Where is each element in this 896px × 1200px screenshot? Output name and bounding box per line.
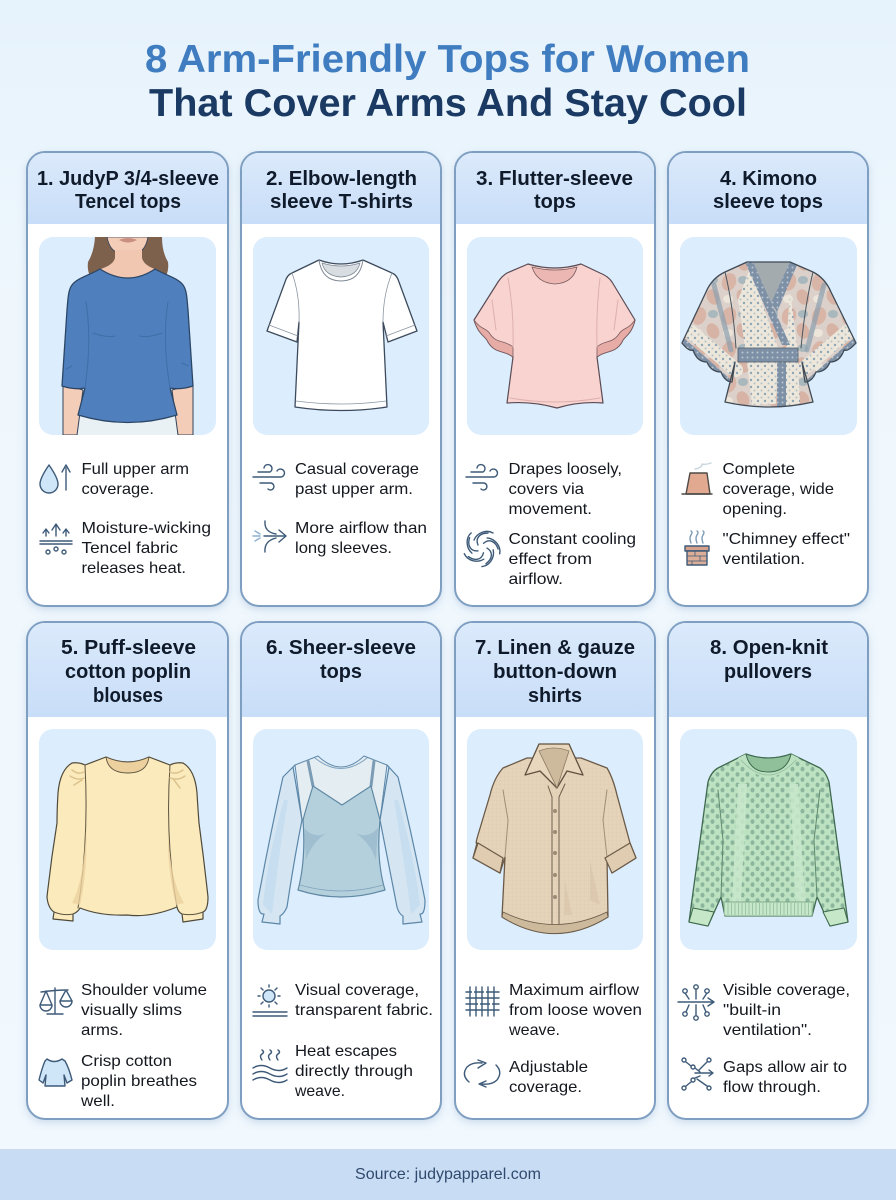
- card 8 header: [669, 623, 867, 717]
- icon: nodes with arrow: [678, 985, 714, 1020]
- text: adjustable coverage: [509, 1059, 588, 1096]
- text: visible coverage: ventilation".: [723, 1022, 812, 1039]
- text: casual coverage: Casual coverage: [295, 461, 419, 478]
- text: full upper arm coverage: Full upper arm: [82, 461, 189, 478]
- card 3 header: tops: [534, 191, 576, 213]
- text: visible coverage: Visible coverage,: [723, 982, 850, 999]
- card 1 header: 1. JudyP 3/4-sleeve: [37, 168, 219, 190]
- text: shoulder volume: Shoulder volume: [81, 982, 207, 999]
- panel: card 7 linen and gauze shirts: [455, 622, 655, 1119]
- text: heat escapes: Heat escapes: [295, 1043, 397, 1060]
- text: chimney effect: "Chimney effect": [722, 531, 850, 548]
- icon: woven lattice: [466, 987, 499, 1016]
- text: complete coverage: [722, 461, 834, 518]
- text: shoulder volume: visually slims: [81, 1002, 182, 1019]
- text: visual coverage: Visual coverage,: [295, 982, 419, 999]
- text: drapes loosely: covers via: [508, 481, 584, 498]
- text: crisp cotton: Crisp cotton: [81, 1053, 172, 1070]
- image panel: woman in blue top: [39, 237, 216, 435]
- card 6 header: tops: [320, 661, 362, 683]
- panel: card 4 kimono sleeve tops: [668, 152, 868, 606]
- card 6 header: 6. Sheer-sleeve: [266, 637, 416, 659]
- panel: card 6 sheer-sleeve tops: [241, 622, 441, 1119]
- text: constant cooling: Constant cooling: [508, 531, 636, 548]
- text: gaps allow air: flow through.: [723, 1079, 821, 1096]
- text: constant cooling: effect from: [508, 551, 592, 568]
- text: chimney effect: [722, 531, 850, 568]
- card 4 header: sleeve tops: [713, 191, 823, 213]
- text: crisp cotton: poplin breathes: [81, 1073, 197, 1090]
- card 7 header: shirts: [528, 685, 582, 707]
- text: constant cooling: [508, 531, 636, 588]
- card 4 header: [669, 153, 867, 224]
- card 8 header: 8. Open-knit: [710, 637, 828, 659]
- card 8 header: pullovers: [724, 661, 812, 683]
- card 2 header: [242, 153, 440, 224]
- text: drapes loosely: Drapes loosely,: [508, 461, 622, 478]
- text: more airflow: More airflow than: [295, 520, 427, 537]
- icon: brick chimney: [685, 531, 709, 565]
- text: full upper arm coverage: [82, 461, 189, 498]
- text: complete coverage: Complete: [722, 461, 795, 478]
- text: moisture-wicking tencel: [82, 520, 211, 577]
- image panel: pink flutter top: [467, 237, 643, 435]
- panel: card 5 puff-sleeve blouses: [27, 622, 228, 1119]
- card 3 header: 3. Flutter-sleeve: [476, 168, 633, 190]
- panel: card 8 open-knit pullovers: [668, 622, 868, 1119]
- image panel: green open-knit pullover: [680, 729, 857, 950]
- text: drapes loosely: movement.: [508, 501, 592, 518]
- icon: blouse: [39, 1059, 72, 1086]
- image panel: linen shirt: [467, 729, 643, 950]
- text: constant cooling: airflow.: [508, 571, 563, 588]
- text: casual coverage: [295, 461, 419, 498]
- card 3 header: [456, 153, 654, 224]
- footer source band: [0, 1149, 896, 1200]
- card 7 header: 7. Linen & gauze: [475, 637, 635, 659]
- text: maximum airflow: [508, 982, 642, 1039]
- text: adjustable coverage: coverage.: [509, 1079, 582, 1096]
- image panel: patterned kimono: [680, 237, 857, 435]
- panel: card 3 flutter-sleeve tops: [455, 152, 655, 606]
- card 7 header: [456, 623, 654, 717]
- text: gaps allow air: [723, 1059, 847, 1096]
- icon: swirling fan: [463, 531, 501, 568]
- text: casual coverage: past upper arm.: [295, 481, 413, 498]
- text: crisp cotton: well.: [80, 1093, 115, 1110]
- panel: card 2 elbow-length T-shirts: [241, 152, 441, 606]
- text: moisture-wicking tencel: Moisture-wicking: [82, 520, 211, 537]
- text: moisture-wicking tencel: Tencel fabric: [82, 540, 178, 557]
- card 4 header: 4. Kimono: [720, 168, 817, 190]
- card 7 header: button-down: [493, 661, 617, 683]
- image panel: white T-shirt: [253, 237, 429, 435]
- title: 8 Arm-Friendly Tops for Women: [145, 38, 750, 81]
- title: That Cover Arms And Stay Cool: [149, 82, 747, 125]
- text: more airflow: [295, 520, 427, 557]
- icon: wind: [253, 465, 284, 490]
- text: moisture-wicking tencel: releases heat.: [82, 560, 186, 577]
- text: complete coverage: coverage, wide: [722, 481, 834, 498]
- text: visible coverage: "built-in: [723, 1002, 781, 1019]
- text: shoulder volume: arms.: [81, 1022, 123, 1039]
- text: maximum airflow: from loose woven: [509, 1002, 642, 1019]
- card 5 header: blouses: [93, 685, 163, 707]
- text: maximum airflow: Maximum airflow: [509, 982, 639, 999]
- card 2 header: 2. Elbow-length: [266, 168, 417, 190]
- card 5 header: cotton poplin: [65, 661, 191, 683]
- text: adjustable coverage: Adjustable: [509, 1059, 588, 1076]
- text: visual coverage: [295, 982, 433, 1019]
- text: chimney effect: ventilation.: [722, 551, 805, 568]
- text: drapes loosely: [508, 461, 622, 518]
- text: gaps allow air: Gaps allow air to: [723, 1059, 847, 1076]
- icon: cycle arrows: [464, 1060, 500, 1087]
- text: maximum airflow: weave.: [508, 1022, 560, 1039]
- text: full upper arm coverage: coverage.: [82, 481, 154, 498]
- text: heat escapes: weave.: [294, 1083, 345, 1100]
- card 2 header: sleeve T-shirts: [270, 191, 413, 213]
- card 1 header: Tencel tops: [75, 191, 181, 213]
- image panel: sheer sleeve top: [253, 729, 429, 950]
- card 1 header: [28, 153, 227, 224]
- text: visual coverage: transparent fabric.: [295, 1002, 433, 1019]
- card 5 header: 5. Puff-sleeve: [61, 637, 196, 659]
- text: crisp cotton: [80, 1053, 197, 1110]
- text: visible coverage: [723, 982, 850, 1039]
- icon: sun above water: [253, 985, 287, 1016]
- icon: network gaps: [682, 1058, 713, 1090]
- text: shoulder volume: [81, 982, 207, 1039]
- text: complete coverage: opening.: [722, 501, 787, 518]
- image panel: yellow puff blouse: [39, 729, 216, 950]
- panel: card 1 JudyP tops: [27, 152, 228, 606]
- title: [145, 38, 750, 125]
- text: heat escapes: directly through: [295, 1063, 413, 1080]
- icon: wind: [466, 465, 497, 490]
- icon: moisture wicking layers: [40, 524, 72, 554]
- icon: heat waves: [253, 1050, 287, 1082]
- icon: volcano-shaped flare: [682, 463, 712, 494]
- footer source band: Source: judypapparel.com: [355, 1166, 541, 1183]
- text: more airflow: long sleeves.: [295, 540, 392, 557]
- card 5 header: [28, 623, 227, 717]
- card 6 header: [242, 623, 440, 717]
- icon: water drop with arrow: [40, 465, 70, 493]
- icon: balance scale: [40, 988, 72, 1014]
- text: heat escapes: [294, 1043, 413, 1100]
- icon: airflow arrows: [253, 521, 286, 552]
